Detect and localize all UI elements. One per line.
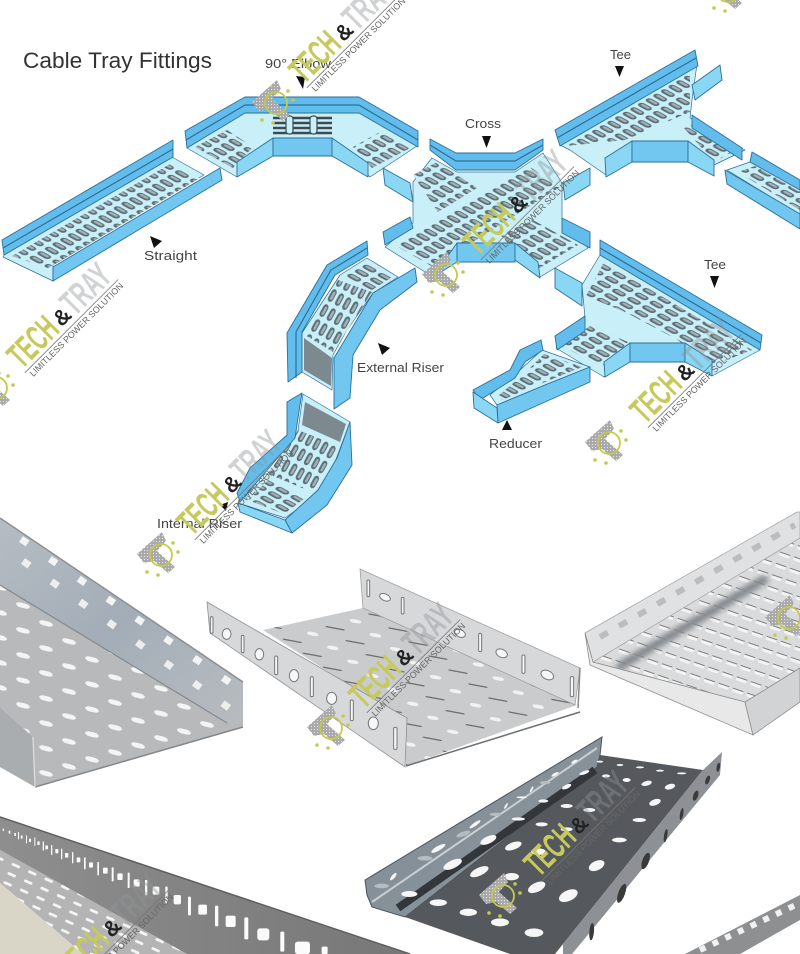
- watermark: right: TECH: [622, 363, 690, 431]
- watermark: lower left: LIMITLESS POWER SOLUTION: [198, 448, 295, 545]
- watermark: lower left: TRAY: [222, 422, 290, 490]
- fitting: tee lower right: [555, 240, 762, 377]
- watermark: right: &: [670, 357, 699, 386]
- watermark: left: [0, 249, 132, 431]
- fitting: cross: [383, 139, 590, 278]
- watermark: centre: [285, 586, 470, 771]
- photo: tray right: [585, 512, 800, 735]
- watermark: bottom left: &: [97, 913, 126, 942]
- watermark: lower left: &: [217, 469, 246, 498]
- watermark: middle: [400, 133, 585, 318]
- label: internal riser: Internal Riser: [157, 516, 243, 531]
- watermark: right: LIMITLESS POWER SOLUTION: [651, 336, 748, 433]
- watermark: top: [230, 0, 413, 146]
- watermark: middle: LIMITLESS POWER SOLUTION: [484, 168, 581, 265]
- watermark: bottom left: TRAY: [102, 866, 170, 934]
- watermark: centre: LIMITLESS POWER SOLUTION: [370, 621, 467, 718]
- photo: tray bottom left: [0, 817, 410, 954]
- watermark: lower left: TECH: [169, 475, 237, 543]
- label: reducer: Reducer: [489, 436, 543, 451]
- watermark: dark tray: TECH: [516, 816, 584, 884]
- fitting: internal riser: [237, 393, 352, 533]
- watermark: left: TECH: [0, 308, 67, 376]
- watermark: dark tray: &: [564, 810, 593, 839]
- fitting: tee top right: [555, 50, 745, 177]
- watermark icon: top right: [704, 0, 747, 13]
- photo: dark tray: [365, 737, 722, 954]
- watermark: dark tray: TRAY: [569, 763, 637, 831]
- label: tee lower: Tee: [704, 257, 726, 272]
- watermark: top: &: [329, 17, 358, 46]
- watermark: centre: TRAY: [394, 595, 462, 663]
- label: external riser: External Riser: [357, 360, 445, 375]
- photo: tray left: [0, 518, 243, 787]
- watermark: right: TRAY: [675, 310, 743, 378]
- watermark: dark tray: LIMITLESS POWER SOLUTION: [545, 789, 642, 886]
- bottom tray punched holes: [3, 828, 328, 954]
- fitting: external riser: [287, 241, 417, 409]
- watermark: middle: &: [503, 189, 532, 218]
- watermark: bottom left: [49, 864, 176, 954]
- fitting: reducer: [473, 340, 590, 423]
- fitting: 90 degree elbow: [185, 97, 418, 177]
- watermark: middle: TECH: [455, 195, 523, 263]
- dark tray floor and wall slots: [389, 759, 686, 937]
- watermark: left: TRAY: [52, 255, 120, 323]
- labels and arrows: [144, 47, 726, 531]
- watermark: centre: TECH: [341, 648, 409, 716]
- fitting: straight tray: [2, 140, 222, 281]
- watermark: right: [563, 299, 750, 486]
- watermark: middle: TRAY: [508, 142, 576, 210]
- watermark: lower left: [115, 414, 299, 598]
- watermark: left: &: [47, 302, 76, 331]
- photo: tray bottom right: [685, 895, 800, 954]
- watermark: left: LIMITLESS POWER SOLUTION: [28, 281, 125, 378]
- label: 90 degree elbow: 90° Elbow: [265, 56, 332, 71]
- label: cross: Cross: [465, 116, 502, 131]
- fitting: partial tray right edge: [725, 152, 800, 229]
- watermark icon: right edge: [765, 595, 800, 640]
- label: straight: Straight: [144, 248, 197, 263]
- label: tee top: Tee: [610, 47, 631, 62]
- watermark: centre: &: [389, 642, 418, 671]
- watermark: dark tray: [457, 752, 644, 939]
- photo: tray centre: [207, 569, 580, 767]
- title: Cable Tray Fittings: [23, 48, 212, 73]
